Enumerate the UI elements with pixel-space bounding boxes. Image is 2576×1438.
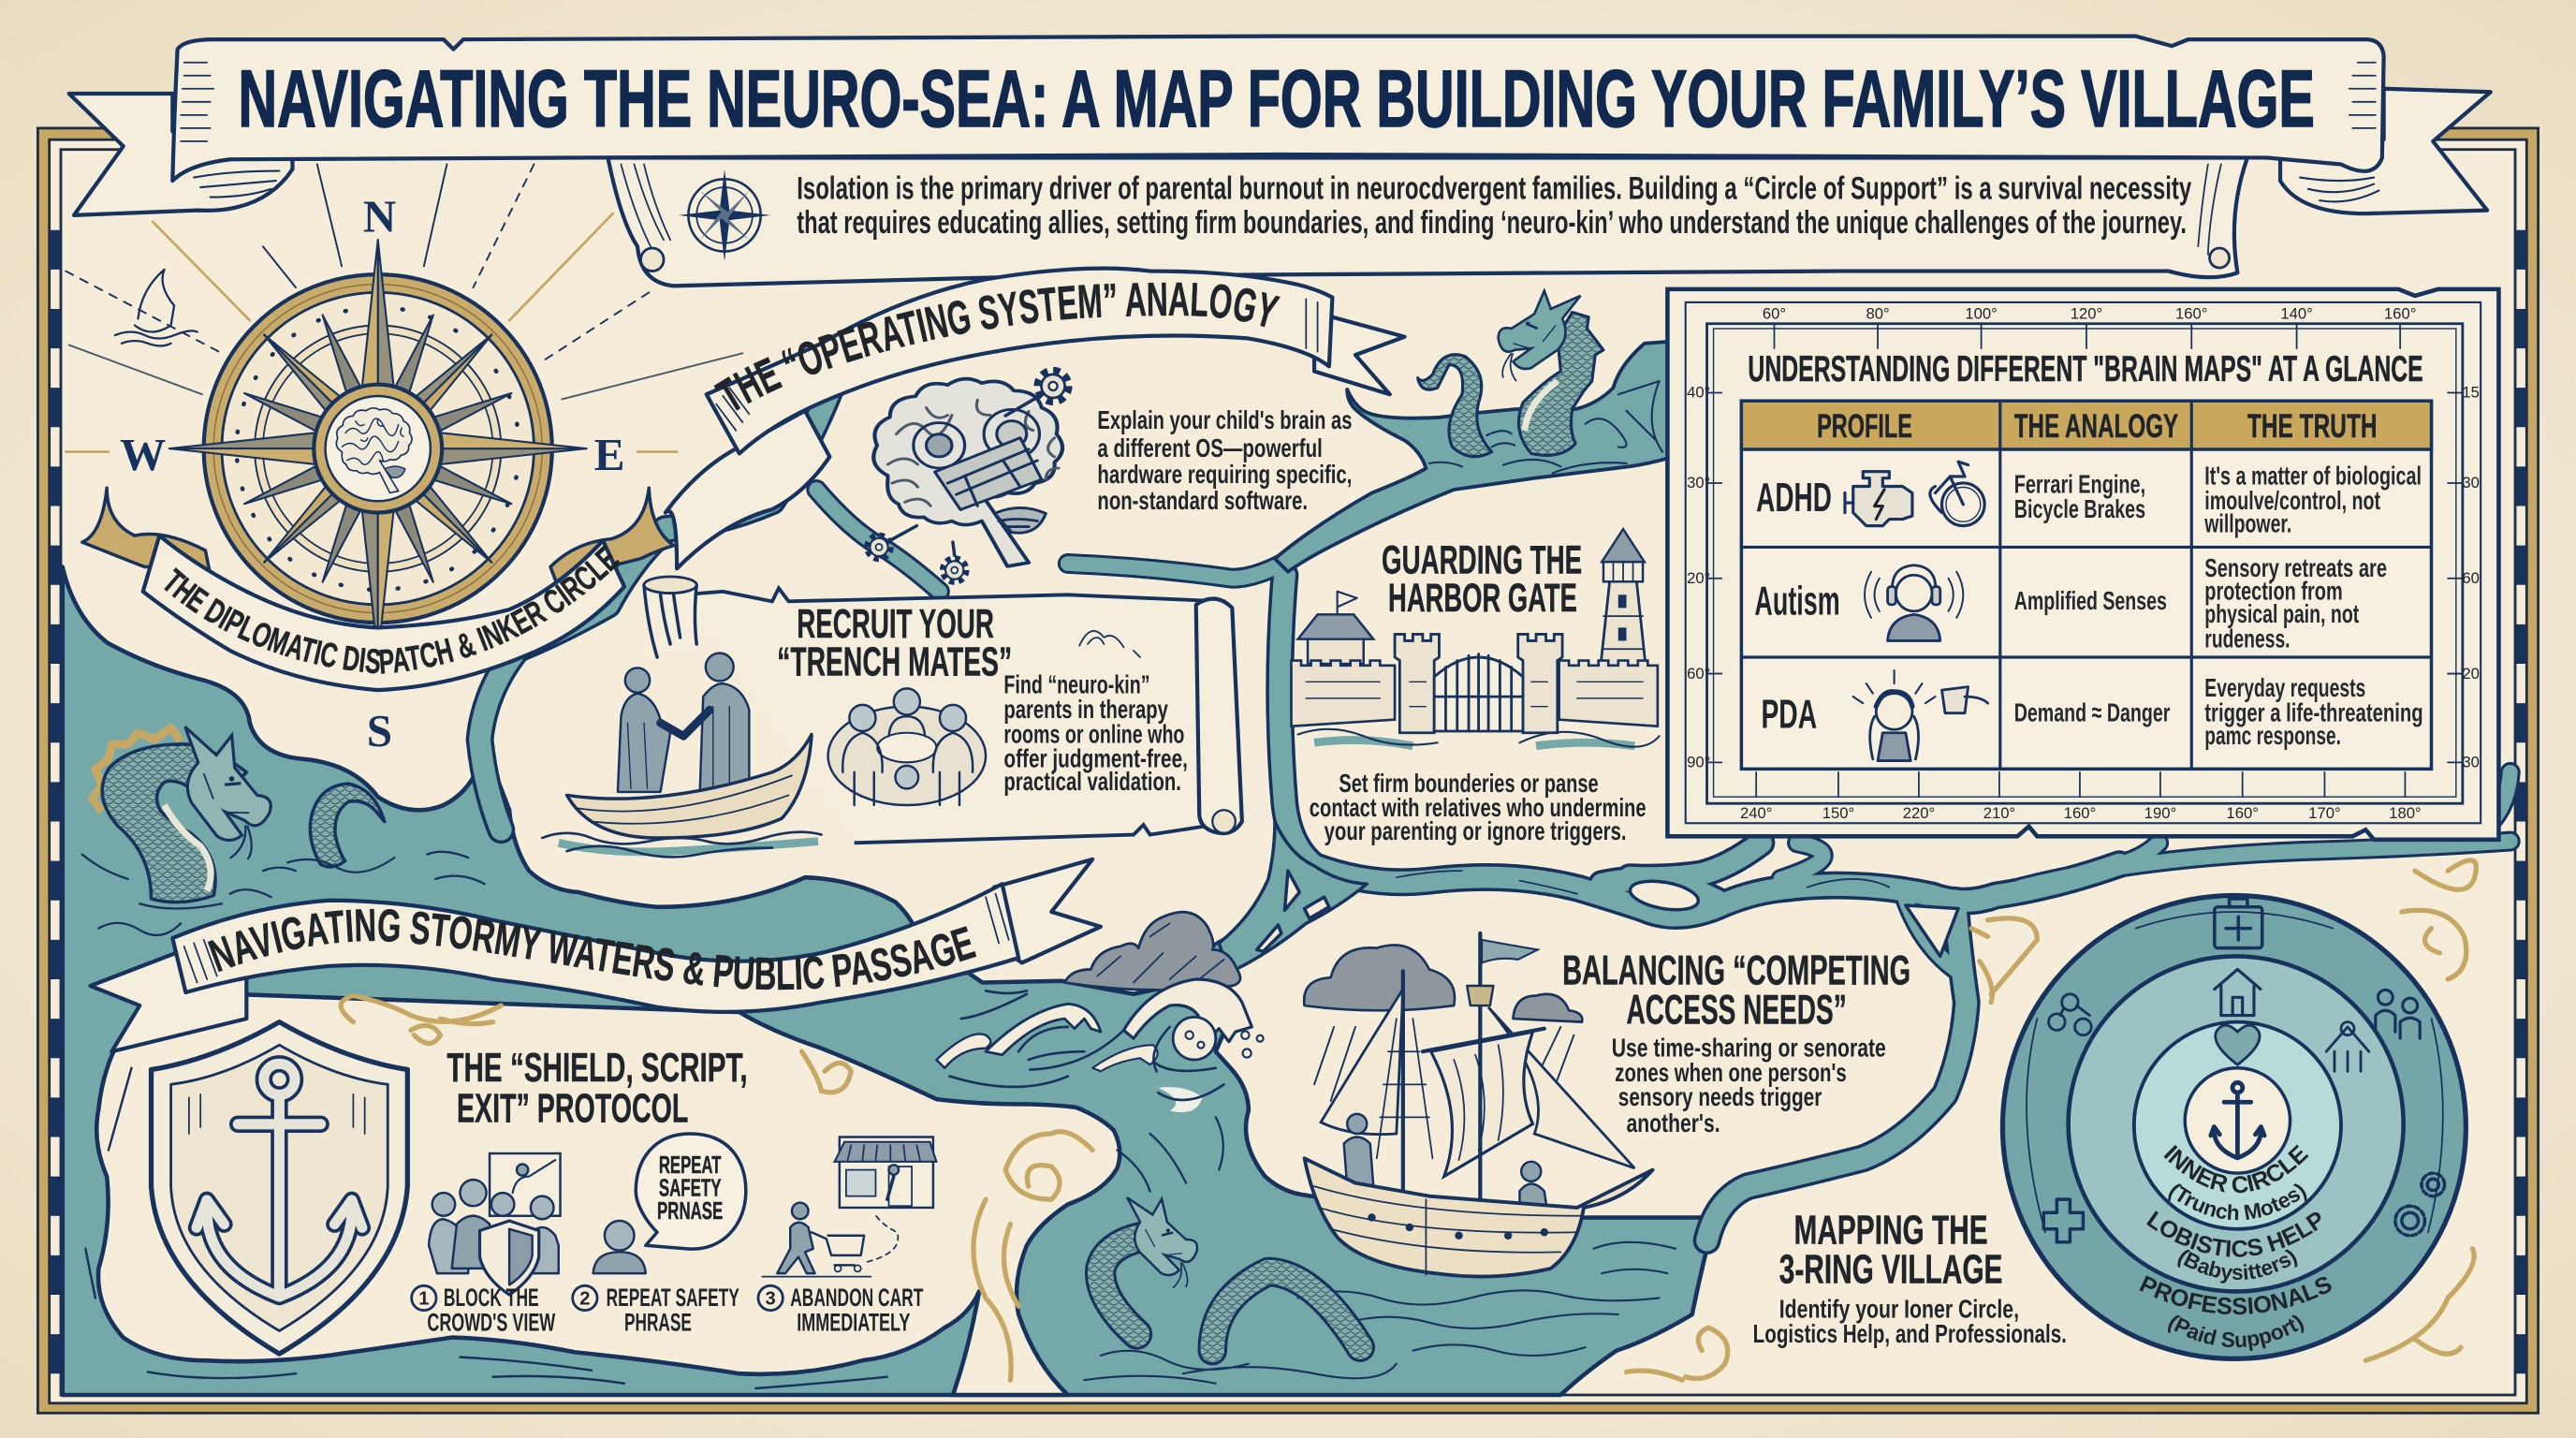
map scale labels: 20 — [2462, 665, 2480, 682]
icon: shopping exit — [762, 1137, 936, 1277]
harbor text — [1310, 769, 1647, 845]
icon: child with headphones — [1865, 565, 1963, 640]
harbor heading — [1382, 538, 1582, 621]
compass letters — [120, 190, 625, 756]
map scale labels: 160° — [2064, 804, 2096, 822]
table header: PROFILE — [1817, 408, 1912, 445]
shield script heading: THE “SHIELD, SCRIPT, — [446, 1045, 748, 1091]
map scale labels: 190° — [2144, 804, 2176, 822]
recruit text: Find “neuro-kin” — [1003, 670, 1150, 699]
operating system text — [1097, 405, 1352, 515]
icon: gears — [2395, 1173, 2445, 1236]
row PDA: pamc response. — [2204, 721, 2341, 750]
row Autism: protection from — [2204, 577, 2343, 606]
icon: small compass rose — [679, 169, 770, 261]
icon: speech bubble: PRNASE — [657, 1198, 723, 1225]
protocol steps: PHRASE — [624, 1308, 692, 1337]
map scale labels: 60° — [1763, 304, 1786, 322]
row ADHD: imoulve/control, not — [2204, 486, 2380, 515]
operating system text: Explain your child's brain as — [1097, 405, 1352, 434]
compass letters: E — [594, 429, 625, 480]
row ADHD: It's a matter of biological — [2204, 462, 2422, 491]
banner label: THE DIPLOMATIC DISPATCH & INKER CIRCLE — [164, 545, 621, 674]
compass star points — [169, 240, 587, 657]
icon: block the crowd — [429, 1153, 561, 1295]
river islands — [1257, 871, 1958, 956]
balancing heading — [1562, 946, 1910, 1033]
map scale labels: 100° — [1965, 304, 1998, 322]
dark cloud and waves — [936, 912, 1264, 1191]
map scale labels: 30 — [2462, 754, 2480, 771]
sea dragon left — [82, 721, 485, 935]
icon: sailing ship — [1298, 933, 1676, 1356]
mapping heading: MAPPING THE — [1794, 1208, 1988, 1254]
map scale labels: 30° — [1687, 474, 1710, 492]
recruit text: parents in therapy — [1003, 695, 1168, 724]
ring labels: (Trunch Motes) — [2168, 1183, 2307, 1221]
harbor heading: GUARDING THE — [1382, 538, 1582, 583]
three ring village diagram — [2002, 895, 2466, 1358]
row ADHD: ADHD — [1756, 475, 1832, 521]
protocol steps: 3 — [766, 1288, 776, 1309]
icon: house — [1298, 592, 1373, 664]
harbor heading: HARBOR GATE — [1388, 576, 1577, 621]
mapping text: Logistics Help, and Professionals. — [1753, 1319, 2067, 1348]
table header: THE TRUTH — [2247, 408, 2378, 445]
map scale labels: 80° — [1866, 304, 1890, 322]
protocol steps: 2 — [579, 1288, 590, 1309]
intro text — [797, 170, 2191, 241]
protocol steps: 1 — [418, 1288, 429, 1309]
sea dragon bottom — [1084, 1193, 1397, 1384]
map scale labels: 120° — [2071, 304, 2102, 322]
icon: brain in compass — [336, 408, 412, 492]
row Autism: Autism — [1754, 578, 1840, 624]
row PDA: Everyday requests — [2204, 673, 2365, 702]
map scale labels: 160° — [2175, 304, 2207, 322]
sea water — [63, 566, 1715, 1395]
waves — [1123, 979, 1251, 1042]
ring labels: (Babysitters) — [2177, 1249, 2297, 1284]
balancing text: zones when one person's — [1615, 1058, 1847, 1087]
ring labels: PROFESSIONALS — [2135, 1271, 2336, 1320]
harbor text: Set firm bounderies or panse — [1339, 769, 1599, 798]
operating system text: a different OS—powerful — [1097, 433, 1323, 462]
comparison table — [1741, 401, 2431, 769]
row Autism: physical pain, not — [2204, 599, 2359, 628]
protocol steps — [412, 1283, 924, 1337]
icon: overwhelmed child — [1853, 670, 1988, 761]
map scale labels: 40° — [1687, 384, 1710, 402]
map scale labels: 240° — [1740, 804, 1772, 822]
rivers — [480, 391, 2510, 1240]
icon: fortress wall and gate — [1292, 634, 1660, 747]
banner: stormy waters — [91, 859, 1101, 1051]
recruit text — [1003, 670, 1188, 796]
map scale labels: 140° — [2280, 304, 2313, 322]
icon: speech bubble — [593, 1134, 746, 1273]
balancing text: another's. — [1627, 1108, 1720, 1137]
recruit heading: RECRUIT YOUR — [797, 601, 994, 647]
mapping text: Identify your Ioner Circle, — [1779, 1295, 2019, 1324]
map scale labels: 160° — [2384, 304, 2416, 322]
row PDA: Demand ≈ Danger — [2014, 697, 2170, 726]
dragon cove water — [1275, 342, 1667, 572]
icon: heart — [2216, 1025, 2260, 1064]
row Autism: rudeness. — [2204, 624, 2291, 653]
icon: birds — [1079, 631, 1140, 657]
map scale labels: 170° — [2308, 804, 2341, 822]
recruit text: rooms or online who — [1003, 719, 1184, 748]
icon: speech bubble: REPEAT — [659, 1152, 722, 1179]
icon: brain with machine — [868, 371, 1068, 581]
balancing text: Use time-sharing or senorate — [1612, 1033, 1886, 1062]
recruit heading — [777, 601, 1012, 684]
row Autism — [1754, 553, 2387, 653]
recruit heading: “TRENCH MATES” — [777, 638, 1012, 684]
banner: operating system analogy — [666, 269, 1405, 568]
map scale labels: 160° — [2226, 804, 2259, 822]
banner label: THE “OPERATING SYSTEM” ANALOGY — [713, 283, 1281, 411]
icon: lighthouse — [1600, 529, 1647, 670]
map scale labels: 30 — [2462, 474, 2480, 492]
banner: diplomatic dispatch — [82, 488, 674, 690]
gold flourishes — [341, 860, 2476, 1380]
map scale labels: 60 — [2462, 569, 2480, 587]
map scale labels — [1687, 304, 2480, 822]
map scale labels: 60° — [1687, 665, 1710, 682]
harbor text: your parenting or ignore triggers. — [1325, 816, 1627, 845]
row Autism: Amplified Senses — [2014, 586, 2167, 615]
icon: small ship sketch — [115, 270, 198, 345]
compass letters: S — [367, 705, 392, 756]
map scale labels: 15 — [2462, 384, 2480, 402]
icon: speech bubble: SAFETY — [659, 1176, 722, 1202]
protocol steps: IMMEDIATELY — [797, 1308, 910, 1337]
icon: engine and bicycle — [1845, 462, 1984, 526]
balancing heading: ACCESS NEEDS” — [1627, 986, 1847, 1033]
ring labels — [2113, 1125, 2359, 1352]
row PDA: trigger a life-threatening — [2204, 697, 2423, 726]
brain maps table panel — [1667, 289, 2498, 840]
mapping heading: 3-RING VILLAGE — [1779, 1247, 2002, 1293]
icon: support group circle — [828, 688, 986, 805]
icon: center anchor — [2211, 1082, 2264, 1158]
river delta — [1219, 822, 1367, 973]
row Autism: Sensory retreats are — [2204, 553, 2387, 582]
row PDA — [1761, 670, 2423, 761]
icon: cross — [2043, 1199, 2083, 1242]
operating system text: hardware requiring specific, — [1097, 460, 1352, 489]
row ADHD: Bicycle Brakes — [2014, 494, 2145, 523]
icon: house — [2215, 969, 2261, 1016]
icon: right scroll roll — [1196, 599, 1242, 833]
shield land panel — [85, 994, 1120, 1395]
protocol steps: BLOCK THE — [444, 1283, 539, 1312]
intro scroll panel — [607, 157, 2247, 286]
icon: anchor — [197, 1064, 362, 1297]
operating system text: non-standard software. — [1097, 486, 1308, 515]
compass rays — [66, 165, 742, 452]
compass wheel — [169, 240, 587, 657]
table header: THE ANALOGY — [2014, 408, 2178, 445]
map scale labels: 20° — [1687, 569, 1710, 587]
row ADHD: Ferrari Engine, — [2014, 470, 2145, 499]
icon: boat with two people — [542, 653, 822, 857]
ring labels: LOBISTICS HELP — [2146, 1211, 2321, 1257]
banner label: NAVIGATING STORMY WATERS & PUBLIC PASSAGE — [208, 908, 977, 990]
icon: linked shapes — [2049, 994, 2091, 1035]
row PDA: PDA — [1761, 691, 1817, 737]
row ADHD: willpower. — [2204, 509, 2291, 538]
shield script heading: EXIT” PROTOCOL — [457, 1086, 688, 1132]
harbor text: contact with relatives who undermine — [1310, 793, 1647, 822]
recruit text: practical validation. — [1003, 767, 1181, 796]
map scale labels: 150° — [1822, 804, 1854, 822]
title banner — [69, 37, 2491, 215]
icon: left scroll roll — [644, 577, 696, 657]
mapping heading — [1779, 1208, 2002, 1293]
compass letters: W — [120, 429, 166, 480]
map scale labels: 210° — [1983, 804, 2015, 822]
icon: people — [2376, 990, 2420, 1038]
ring labels: (Paid Support) — [2164, 1309, 2307, 1352]
recruit text: offer judgment-free, — [1003, 744, 1188, 773]
balancing text: sensory needs trigger — [1618, 1082, 1822, 1111]
shield script heading — [446, 1045, 748, 1132]
map scale labels: 180° — [2389, 804, 2422, 822]
map scale labels: 90° — [1687, 754, 1710, 771]
map scale labels: 220° — [1903, 804, 1935, 822]
recruit land panel — [542, 577, 1242, 857]
compass letters: N — [363, 190, 396, 242]
protocol steps: REPEAT SAFETY — [607, 1283, 739, 1312]
icon: medical kit — [2215, 899, 2262, 948]
icon: community — [2326, 1022, 2369, 1071]
ring labels: INNER CIRCLE — [2164, 1144, 2308, 1193]
guarding the harbor gate — [1292, 529, 1660, 845]
icon: sea dragon top — [1418, 291, 1662, 473]
mapping text — [1753, 1295, 2067, 1348]
protocol steps: CROWD'S VIEW — [427, 1308, 555, 1337]
shield with anchor — [152, 1022, 407, 1354]
table header — [1817, 408, 2378, 445]
balancing text — [1612, 1033, 1886, 1137]
protocol steps: ABANDON CART — [790, 1283, 924, 1312]
row ADHD — [1756, 462, 2422, 538]
balancing heading: BALANCING “COMPETING — [1562, 946, 1910, 993]
